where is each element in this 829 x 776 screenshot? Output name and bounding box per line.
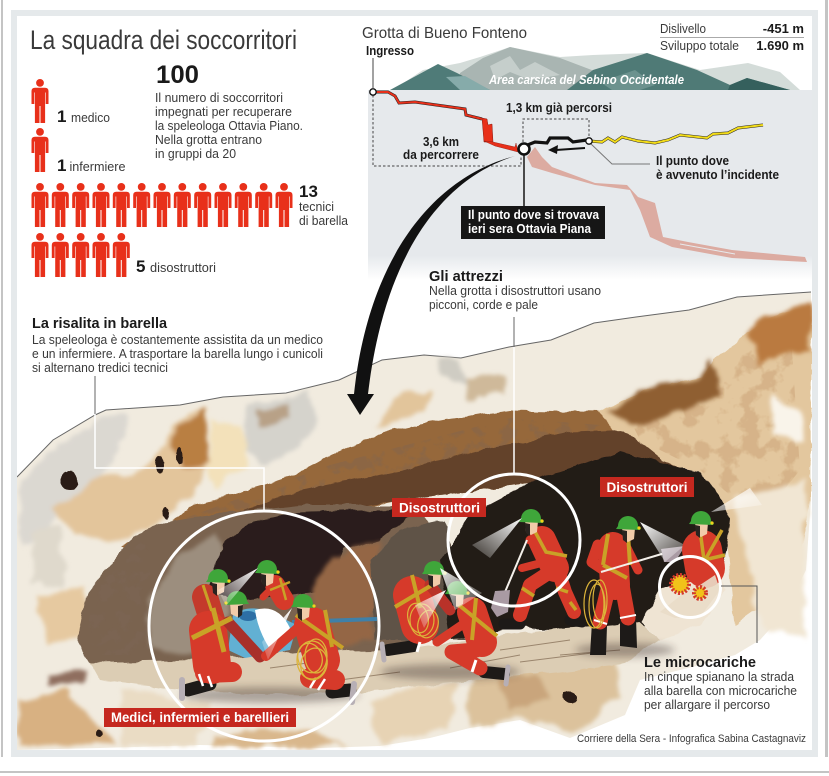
label: 3,6 km: 3,6 km (423, 135, 459, 149)
rock: washes and stains (20, 360, 620, 748)
cave: dark ceiling (207, 508, 420, 600)
rock: left cave mass (77, 505, 470, 665)
cave illustration (17, 292, 811, 750)
title: La squadra dei soccorritori (30, 25, 297, 55)
cave section: yellow path (589, 125, 763, 143)
callout: Le microcariche (644, 586, 797, 712)
icon: infermiere: 1 (57, 156, 66, 175)
icon: infermiere (32, 128, 126, 175)
label: Area carsica: Area carsica del Sebino Occidentale (488, 73, 684, 87)
group: medici e barellieri (182, 560, 377, 702)
icon: infermiere: infermiere (70, 160, 126, 174)
icons: tecnici di barella: tecnici (299, 200, 334, 214)
light beams (218, 568, 292, 660)
big black arrow (347, 156, 515, 415)
figure: rescuer rear left (203, 569, 231, 620)
icons: disostruttori: disostruttori (150, 261, 216, 275)
callout: punto incidente: è avvenuto l’incidente (656, 168, 779, 182)
rock: right tan mass (600, 305, 811, 640)
icons: disostruttori (32, 233, 216, 277)
callout: Gli attrezzi (429, 268, 601, 474)
label: 3,6 km: da percorrere (403, 148, 479, 162)
callout: punto incidente (586, 138, 779, 182)
group: disostruttori with ropes (382, 561, 508, 684)
icon: medico (32, 79, 110, 126)
cave: black right chamber (440, 452, 730, 640)
label: 1,3 km: 1,3 km già percorsi (506, 101, 612, 115)
figure: rescuer at the wall (689, 488, 762, 568)
cave: floor (90, 622, 660, 695)
figure: crouching rescuer (415, 568, 508, 684)
figure: rescuer rear centre (255, 560, 290, 600)
callout: punto Ottavia Piana: Il punto dove si trovava (468, 208, 600, 222)
cave section: pink unexplored branch (527, 147, 807, 262)
arrow: direction of travel (548, 145, 585, 154)
callout: 100 soccorritori: la speleologa Ottavia Piano. (155, 119, 303, 133)
label: Disostruttori right: Disostruttori (606, 479, 688, 495)
callout: Le microcariche: alla barella con microcariche (644, 684, 797, 698)
circle: medici (149, 511, 379, 741)
callout: punto Ottavia Piana (461, 144, 605, 239)
dashed brackets (373, 95, 589, 166)
label: Medici, infermieri e barellieri: Medici, infermieri e barellieri (111, 709, 289, 725)
rock: top outline (17, 292, 811, 477)
callout: Gli attrezzi: Nella grotta i disostruttori usano (429, 284, 601, 298)
team pictogram panel (32, 79, 348, 277)
cave: pale boulder on right (642, 580, 726, 640)
callout: La risalita in barella (32, 315, 323, 511)
rock: band mottling (188, 418, 598, 518)
icon: medico: 1 (57, 107, 66, 126)
microcharges circle (660, 556, 720, 618)
callout: 100 soccorritori: in gruppi da 20 (155, 147, 236, 161)
callout: Gli attrezzi: picconi, corde e pale (429, 298, 538, 312)
cave: brown pillar (310, 540, 382, 648)
icons: tecnici di barella: 13 (299, 182, 318, 201)
figure: shovel digger (472, 509, 582, 624)
stretcher (228, 608, 377, 658)
callout: 100 soccorritori: Nella grotta entrano (155, 133, 262, 147)
marker: ingresso (366, 44, 414, 95)
rock: left mass mottling (85, 535, 150, 655)
cross-section background (368, 90, 812, 280)
cave: grey wall inside circle (150, 535, 232, 655)
table: cave stats: Sviluppo totale (660, 39, 739, 53)
rock: dark holes (61, 446, 577, 736)
callout: Le microcariche: Le microcariche (644, 654, 756, 671)
callout: Gli attrezzi: Gli attrezzi (429, 268, 503, 285)
callout: Le microcariche: per allargare il percorso (644, 698, 770, 712)
figure: pickaxe rescuer (584, 516, 685, 655)
label: 3,6 km (403, 135, 479, 162)
icons: disostruttori: 5 (136, 257, 145, 276)
mountains (390, 47, 800, 90)
table: cave stats: 1.690 m (756, 38, 804, 53)
rock: brown band (121, 410, 612, 548)
figure: rescuer front left (182, 591, 260, 698)
callout: La risalita in barella: La speleologa è costantemente assistita da un medico (32, 333, 323, 347)
cave section: red path to percorrere (373, 92, 518, 152)
cave: floor detail (270, 640, 620, 680)
icons: tecnici di barella (32, 182, 348, 228)
table: cave stats: Dislivello (660, 22, 706, 36)
table: cave stats (660, 21, 804, 53)
credit: Corriere della Sera - Infografica Sabina Castagnaviz (577, 733, 806, 745)
callout: La risalita in barella: La risalita in barella (32, 315, 168, 332)
cave: shadows under crews (180, 643, 675, 703)
rock: dark inner band (242, 430, 680, 511)
rock: pale outer mass (17, 292, 811, 750)
callout: La risalita in barella: e un infermiere. A trasportare la barella lungo i cunicoli (32, 347, 323, 361)
figure: rescuer front right (266, 594, 354, 702)
icon: medico: medico (71, 111, 110, 125)
circle: attrezzi (448, 474, 580, 606)
table: cave stats: -451 m (763, 21, 804, 36)
callout: La risalita in barella: si alternano tredici tecnici (32, 361, 168, 375)
figure: kneeling rescuer (382, 561, 450, 660)
callout: 100 soccorritori: Il numero di soccorritori (155, 91, 283, 105)
callout: 100 soccorritori: impegnati per recuperare (155, 105, 292, 119)
callout: punto incidente: Il punto dove (656, 154, 729, 168)
marker: ingresso: Ingresso (366, 44, 414, 58)
panel: grotta cross-section (362, 21, 812, 280)
icons: tecnici di barella: di barella (299, 214, 348, 228)
callout: punto Ottavia Piana: ieri sera Ottavia Piana (468, 222, 592, 236)
cave section: black path already done (525, 138, 587, 146)
callout: Le microcariche: In cinque spianano la strada (644, 670, 794, 684)
cave: grey chamber (370, 520, 465, 640)
heading: Grotta di Bueno Fonteno: Grotta di Bueno Fonteno (362, 25, 527, 42)
callout: 100 soccorritori (155, 61, 303, 161)
label: Disostruttori left: Disostruttori (399, 500, 480, 516)
callout: 100 soccorritori: 100 (156, 61, 199, 89)
